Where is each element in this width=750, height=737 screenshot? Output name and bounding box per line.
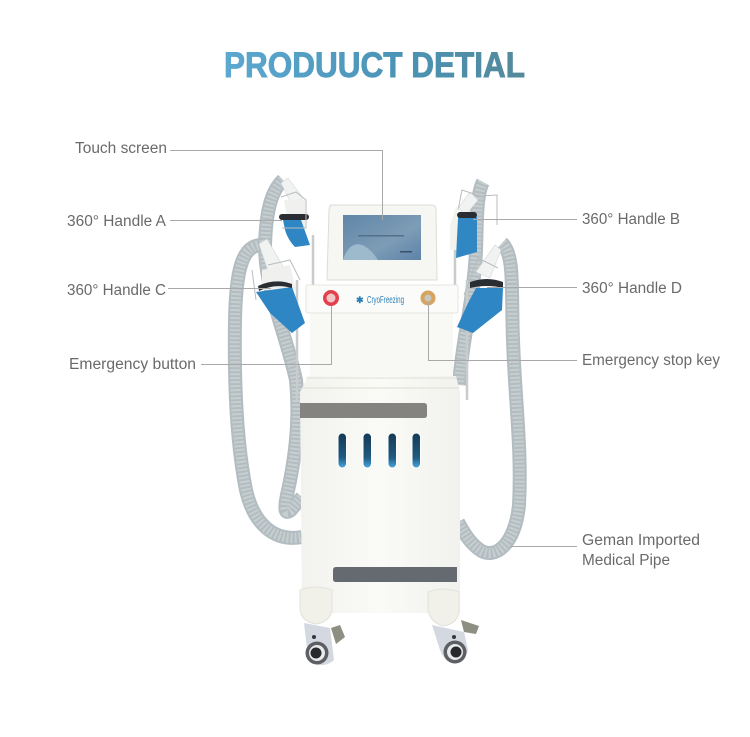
handle C [252,239,305,333]
handle D [457,245,503,333]
label: 360° Handle C: 360° Handle C [67,282,166,299]
label: Geman Imported Medical Pipe: Medical Pipe [582,552,670,569]
touch screen [327,205,437,280]
hoses [235,180,520,553]
title: PRODUUCT DETIAL [224,46,525,85]
logo text [356,295,404,306]
logo text: ✱ [356,295,364,305]
support rods [297,235,467,400]
leader lines [168,150,577,546]
handle B [450,190,497,258]
label: Touch screen: Touch screen [75,140,167,157]
lower cabinet [300,305,460,613]
label: 360° Handle A: 360° Handle A [67,213,167,230]
label: Geman Imported Medical Pipe [582,532,700,569]
logo text: CryoFreezing [367,295,404,306]
handle A [279,178,310,247]
label: Geman Imported Medical Pipe: Geman Imported [582,532,700,549]
control panel [306,285,458,313]
label: 360° Handle D: 360° Handle D [582,280,682,297]
label: Emergency stop key: Emergency stop key [582,352,720,369]
caster feet and wheels [300,587,479,665]
machine [235,178,520,665]
label: Emergency button: Emergency button [69,356,196,373]
emergency button [323,290,339,306]
emergency stop key [420,290,436,306]
label: 360° Handle B: 360° Handle B [582,211,680,228]
